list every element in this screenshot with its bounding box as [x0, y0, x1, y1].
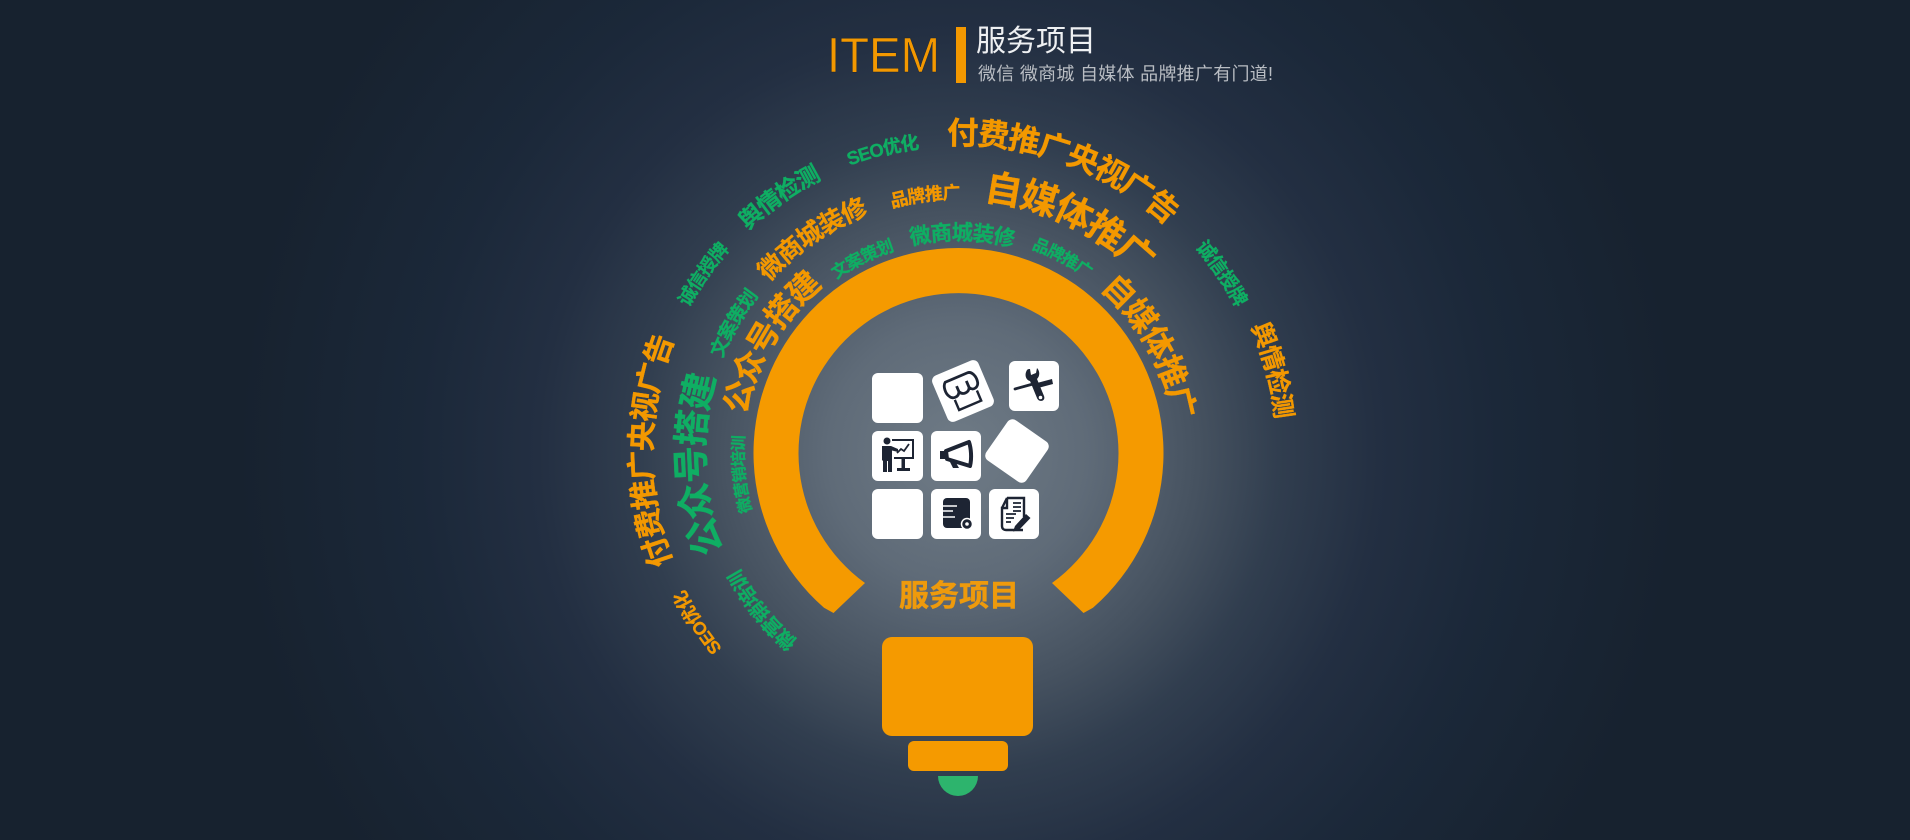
heading: ITEM: ITEM [827, 29, 940, 83]
word: sentiment monitoring green: 舆情检测 [737, 162, 821, 230]
word: micro mall green: 微商城装修 [908, 222, 1016, 247]
word: paid promotion left: 付费推广央视广告 [626, 334, 675, 567]
word: SEO orange: SEO优化 [674, 590, 720, 654]
bulb ring [754, 248, 1164, 613]
tile: document with pencil [989, 489, 1039, 539]
word: sentiment monitoring orange: 舆情检测 [1250, 322, 1296, 418]
word: micro marketing lower: 微营销培训 [726, 568, 797, 651]
heading: service items: 服务项目 [976, 25, 1096, 58]
word: self media inner: 自媒体推广 [1101, 275, 1197, 414]
label: service items: 服务项目 [899, 580, 1019, 613]
tile: blank bottom left [872, 489, 923, 539]
tile: megaphone [931, 431, 981, 481]
word: micro marketing inner: 微营销培训 [730, 436, 753, 514]
word: self media outer: 自媒体推广 [988, 171, 1156, 258]
word: official account green: 公众号搭建 [672, 372, 722, 555]
word: integrity green right: 诚信授牌 [1196, 239, 1249, 306]
word cloud arcs [626, 117, 1296, 654]
word: copywriting outer: 文案策划 [710, 286, 758, 358]
orange header bar [956, 27, 966, 83]
bulb base small [908, 741, 1008, 771]
subtitle: 微信 微商城 自媒体 品牌推广有门道! [978, 64, 1273, 84]
bulb tip [938, 776, 978, 796]
tile: blank top left [872, 373, 923, 423]
tile: blank rotated [983, 417, 1051, 485]
word: brand promotion green: 品牌推广 [1032, 237, 1094, 272]
word: brand promotion orange: 品牌推广 [892, 184, 960, 210]
word: copywriting inner: 文案策划 [830, 237, 894, 280]
tile: presenter with chart [872, 431, 923, 481]
tile: shop icon rotated [930, 358, 996, 424]
word: paid promotion right: 付费推广央视广告 [948, 117, 1180, 225]
header [827, 25, 1273, 84]
word: micro mall orange: 微商城装修 [756, 197, 867, 282]
word: SEO green: SEO优化 [847, 134, 919, 164]
word: integrity green left: 诚信授牌 [676, 241, 729, 306]
tile: wrench and screwdriver [1009, 361, 1059, 411]
icon grid [872, 358, 1059, 539]
tile: dark file with person badge [931, 489, 981, 539]
bulb base large [882, 637, 1033, 736]
word: official account orange: 公众号搭建 [722, 269, 823, 411]
